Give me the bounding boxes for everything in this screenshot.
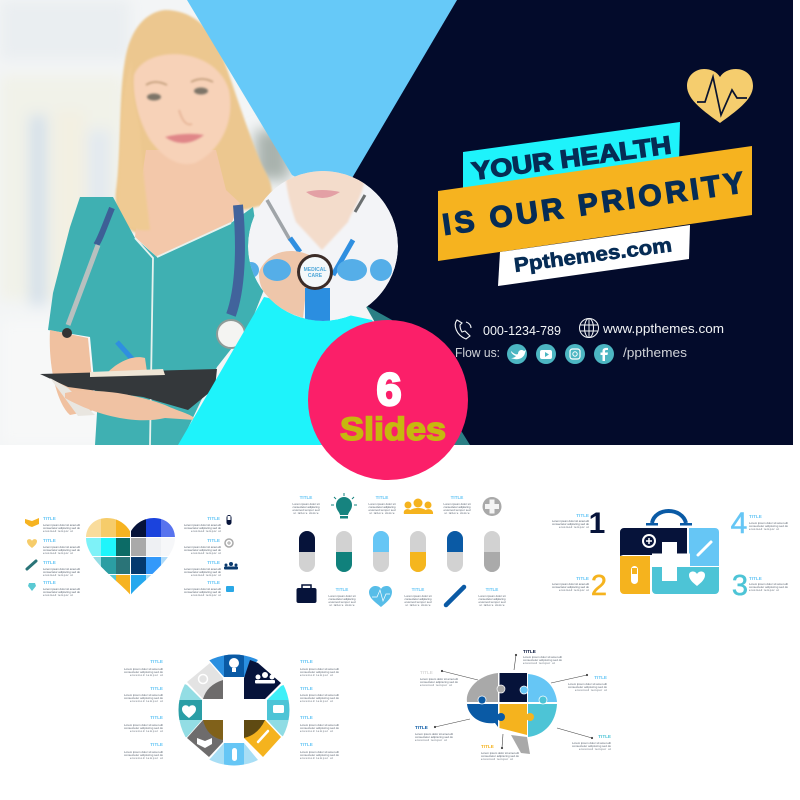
brain labels: Lorem ipsum dolor sit amet elit [523, 655, 562, 659]
wheel right labels: Lorem ipsum dolor sit amet elit [300, 750, 339, 754]
bottom text blocks: ut labore dolore [406, 603, 431, 607]
wheel segments [178, 654, 290, 766]
bottom text blocks: Lorem ipsum dolor sit [478, 594, 506, 598]
kit labels: Lorem ipsum dolor sit amet elit [749, 582, 788, 586]
hair front strand [118, 133, 150, 231]
number 3: 3 [732, 570, 748, 602]
kit labels: Lorem ipsum dolor sit amet elit [749, 521, 788, 525]
icon: plus circle [225, 539, 233, 547]
wheel right labels: eiusmod tempor ut [300, 729, 333, 733]
slide 5: puzzle brain [415, 649, 611, 761]
face [134, 54, 230, 164]
top text blocks: consectetur adipiscing [368, 505, 396, 509]
right labels: consectetur adipiscing sed do [184, 570, 221, 574]
kit dark panel [620, 528, 687, 556]
top text blocks: Lorem ipsum dolor sit [444, 502, 471, 506]
brain labels: consectetur adipiscing sed do [481, 754, 519, 758]
stethoscope head [297, 254, 333, 290]
icon: pill [226, 515, 232, 525]
icon: plus circle [482, 497, 502, 516]
right labels: eiusmod tempor ut [191, 573, 221, 577]
nurse illustration [40, 10, 272, 445]
slide 2: capsules [292, 493, 506, 607]
right labels: TITLE [207, 580, 220, 585]
wheel left labels: eiusmod tempor ut [130, 756, 163, 760]
bottom text blocks: consectetur adipiscing [404, 597, 432, 601]
headline band: website: Ppthemes.com [513, 234, 673, 277]
kit labels: consectetur adipiscing sed do [552, 522, 589, 526]
right labels: consectetur adipiscing sed do [184, 548, 221, 552]
kit yellow panel [620, 556, 650, 594]
wheel right labels: eiusmod tempor ut [300, 756, 333, 760]
bottom text blocks: Lorem ipsum dolor sit [404, 594, 432, 598]
left labels: TITLE [43, 538, 56, 543]
kit labels: eiusmod tempor ut [749, 527, 779, 531]
bottom text blocks: ut labore dolore [480, 603, 505, 607]
top text blocks: Lorem ipsum dolor sit [292, 502, 320, 506]
stethoscope tubing [267, 195, 365, 275]
top text blocks: eiusmod tempor sed [368, 508, 396, 512]
medical icon badges [243, 259, 392, 281]
left labels [43, 516, 80, 597]
bottom text blocks: eiusmod tempor sed [328, 600, 356, 604]
holding hand [65, 391, 195, 420]
brain labels: Lorem ipsum dolor sit amet elit [481, 751, 519, 755]
brain labels: eiusmod tempor ut [575, 688, 607, 692]
left labels: Lorem ipsum dolor sit amet elit [43, 545, 80, 549]
kit labels: consectetur adipiscing sed do [749, 524, 788, 528]
right labels: TITLE [207, 560, 220, 565]
wheel left labels: TITLE [150, 715, 163, 720]
number 4: 4 [731, 507, 747, 540]
headline band: your health [463, 122, 680, 194]
icon: bulb [331, 493, 357, 518]
icon: people [224, 562, 238, 570]
right labels: Lorem ipsum dolor sit amet elit [184, 587, 221, 591]
stethoscope tube [305, 288, 330, 321]
right labels: TITLE [207, 538, 220, 543]
brain labels: TITLE [481, 744, 494, 749]
wheel right labels: consectetur adipiscing sed do [300, 753, 339, 757]
right labels: Lorem ipsum dolor sit amet elit [184, 545, 221, 549]
kit blue panel [689, 528, 719, 566]
brain labels: Lorem ipsum dolor sit amet elit [568, 682, 607, 686]
brain puzzle [467, 673, 557, 754]
kit labels: Lorem ipsum dolor sit amet elit [552, 582, 589, 586]
hair back [116, 10, 272, 236]
brain labels: eiusmod tempor ut [579, 747, 611, 751]
arm [50, 330, 95, 415]
brain labels: TITLE [598, 734, 611, 739]
follow label: Flow us: [455, 346, 500, 360]
left labels: TITLE [43, 560, 56, 565]
circular doctor photo [243, 165, 398, 326]
wheel left labels [124, 659, 163, 760]
left labels: Lorem ipsum dolor sit amet elit [43, 523, 80, 527]
top text blocks: consectetur adipiscing [444, 505, 471, 509]
right labels: consectetur adipiscing sed do [184, 590, 221, 594]
top text blocks: TITLE [300, 495, 312, 500]
headline band: your health: YOUR HEALTH [470, 131, 673, 186]
left labels: Lorem ipsum dolor sit amet elit [43, 587, 80, 591]
brain labels: Lorem ipsum dolor sit amet elit [420, 677, 458, 681]
left labels: consectetur adipiscing sed do [43, 590, 80, 594]
brain labels: consectetur adipiscing sed do [420, 680, 458, 684]
wheel left labels: Lorem ipsum dolor sit amet elit [124, 667, 163, 671]
left labels: consectetur adipiscing sed do [43, 526, 80, 530]
bottom text blocks: Lorem ipsum dolor sit [328, 594, 356, 598]
brain labels [415, 649, 611, 761]
wheel left labels: Lorem ipsum dolor sit amet elit [124, 750, 163, 754]
bottom text blocks: TITLE [336, 587, 348, 592]
wheel left labels: Lorem ipsum dolor sit amet elit [124, 723, 163, 727]
pen [117, 342, 135, 362]
social icons [507, 344, 614, 364]
wheel right labels: Lorem ipsum dolor sit amet elit [300, 667, 339, 671]
wheel icons [182, 658, 284, 761]
heart pulse icon [687, 69, 753, 123]
wheel right labels: consectetur adipiscing sed do [300, 726, 339, 730]
kit labels: TITLE [576, 513, 589, 518]
bottom text blocks: TITLE [486, 587, 498, 592]
left labels: Lorem ipsum dolor sit amet elit [43, 567, 80, 571]
number 2: 2 [591, 570, 607, 602]
top text blocks: ut labore dolore [294, 511, 319, 515]
brain labels: consectetur adipiscing sed do [415, 735, 453, 739]
wheel left labels: TITLE [150, 686, 163, 691]
left labels: TITLE [43, 516, 56, 521]
kit labels: TITLE [749, 514, 762, 519]
top text blocks: eiusmod tempor sed [444, 508, 471, 512]
brain labels: consectetur adipiscing sed do [568, 685, 607, 689]
wheel right labels: TITLE [300, 686, 313, 691]
right labels: consectetur adipiscing sed do [184, 526, 221, 530]
bottom text blocks: consectetur adipiscing [478, 597, 506, 601]
kit labels: TITLE [576, 576, 589, 581]
right labels: Lorem ipsum dolor sit amet elit [184, 523, 221, 527]
headline band: website [498, 225, 690, 286]
thermometer [698, 542, 711, 555]
wheel right labels: Lorem ipsum dolor sit amet elit [300, 693, 339, 697]
slide 4: cross wheel [124, 650, 339, 770]
wheel right labels [300, 659, 339, 760]
right labels: Lorem ipsum dolor sit amet elit [184, 567, 221, 571]
leader lines [434, 654, 593, 749]
wheel right labels: eiusmod tempor ut [300, 673, 333, 677]
brain labels: TITLE [594, 675, 607, 680]
hand [259, 251, 310, 318]
right labels: eiusmod tempor ut [191, 593, 221, 597]
kit labels: TITLE [749, 576, 762, 581]
brain labels: consectetur adipiscing sed do [572, 744, 611, 748]
eyes and mouth [146, 79, 213, 143]
wheel right labels: TITLE [300, 742, 313, 747]
icon: briefcase [296, 585, 316, 603]
wheel right labels: TITLE [300, 715, 313, 720]
kit teal panel [652, 567, 719, 594]
wheel right labels: eiusmod tempor ut [300, 699, 333, 703]
headline band: is our priority: IS OUR PRIORITY [440, 166, 746, 242]
bottom text blocks [328, 587, 506, 607]
right labels: eiusmod tempor ut [191, 551, 221, 555]
bottom text blocks: ut labore dolore [330, 603, 355, 607]
right labels: eiusmod tempor ut [191, 529, 221, 533]
top text blocks: TITLE [376, 495, 388, 500]
slide 1: heart grid [25, 515, 238, 597]
icon: globe [580, 318, 598, 338]
kit labels: eiusmod tempor ut [559, 525, 589, 529]
wheel left labels: consectetur adipiscing sed do [124, 696, 163, 700]
wheel right labels: consectetur adipiscing sed do [300, 670, 339, 674]
scrub collar and placket [135, 223, 231, 445]
icon: small heart [27, 539, 37, 548]
contact row [455, 318, 724, 364]
wheel left labels: eiusmod tempor ut [130, 673, 163, 677]
brain labels: eiusmod tempor ut [415, 738, 447, 742]
icon: bulb [28, 583, 36, 591]
icon: thermometer [27, 561, 36, 569]
left labels: eiusmod tempor ut [43, 573, 73, 577]
icon: heart pulse [369, 586, 392, 607]
left labels: eiusmod tempor ut [43, 593, 73, 597]
capsule row [299, 531, 500, 572]
brain labels: consectetur adipiscing sed do [523, 658, 562, 662]
icon: handshake [25, 518, 39, 527]
wheel right labels: TITLE [300, 659, 313, 664]
white cross [652, 542, 690, 581]
kit labels: eiusmod tempor ut [749, 588, 779, 592]
slide count badge: Slides [340, 411, 446, 447]
bottom text blocks: consectetur adipiscing [328, 597, 356, 601]
website: www.ppthemes.com [602, 322, 724, 336]
top text blocks: Lorem ipsum dolor sit [368, 502, 396, 506]
brain labels: eiusmod tempor ut [523, 661, 555, 665]
neck and chest [135, 150, 240, 257]
left labels: consectetur adipiscing sed do [43, 570, 80, 574]
kit labels: eiusmod tempor ut [559, 588, 589, 592]
kit labels [552, 513, 788, 592]
icon: case [226, 586, 234, 592]
icon: phone [455, 320, 471, 339]
writing hand [108, 357, 147, 372]
top text blocks: ut labore dolore [370, 511, 395, 515]
wheel left labels: consectetur adipiscing sed do [124, 753, 163, 757]
heart chart [86, 518, 175, 595]
bottom text blocks: eiusmod tempor sed [404, 600, 432, 604]
top text blocks: ut labore dolore [444, 511, 470, 515]
navy panel [345, 0, 793, 445]
brain labels: eiusmod tempor ut [481, 757, 513, 761]
wheel left labels: consectetur adipiscing sed do [124, 670, 163, 674]
kit labels: Lorem ipsum dolor sit amet elit [552, 519, 589, 523]
right labels [184, 516, 221, 597]
slide count badge [308, 320, 468, 480]
wheel right labels: Lorem ipsum dolor sit amet elit [300, 723, 339, 727]
top text blocks: TITLE [451, 495, 463, 500]
brain labels: TITLE [523, 649, 536, 654]
wheel right labels: consectetur adipiscing sed do [300, 696, 339, 700]
doctor skin and lips [285, 165, 365, 250]
stethoscope [62, 205, 245, 348]
brain labels: Lorem ipsum dolor sit amet elit [415, 732, 453, 736]
sky blue triangle [187, 0, 457, 177]
left labels: consectetur adipiscing sed do [43, 548, 80, 552]
left labels: eiusmod tempor ut [43, 529, 73, 533]
social handle: /ppthemes [623, 346, 687, 360]
heart icon [689, 571, 705, 586]
top text blocks: eiusmod tempor sed [292, 508, 320, 512]
right labels: TITLE [207, 516, 220, 521]
bottom text blocks: TITLE [412, 587, 424, 592]
bottom text blocks: eiusmod tempor sed [478, 600, 506, 604]
wheel left labels: eiusmod tempor ut [130, 699, 163, 703]
icon: thermometer [446, 587, 464, 605]
wheel left labels: Lorem ipsum dolor sit amet elit [124, 693, 163, 697]
scrubs [48, 197, 265, 445]
brain labels: Lorem ipsum dolor sit amet elit [572, 741, 611, 745]
number 1: 1 [589, 507, 605, 540]
top text blocks [292, 495, 471, 515]
headline band: is our priority [438, 146, 752, 261]
brain labels: TITLE [415, 725, 428, 730]
blurred hospital background [0, 0, 374, 445]
kit labels: consectetur adipiscing sed do [552, 585, 589, 589]
brain labels: TITLE [420, 670, 433, 675]
pill [631, 566, 638, 584]
slide count badge: 6 [376, 364, 402, 415]
teal strip [365, 305, 470, 445]
kit handle [646, 511, 692, 526]
top text blocks: consectetur adipiscing [292, 505, 320, 509]
wheel left labels: TITLE [150, 742, 163, 747]
stethoscope head: MEDICAL [304, 267, 326, 273]
icon: people [404, 498, 433, 514]
wheel left labels: eiusmod tempor ut [130, 729, 163, 733]
left labels: TITLE [43, 580, 56, 585]
stethoscope head: CARE [308, 273, 323, 279]
slide 3: medical kit [552, 507, 788, 602]
kit labels: consectetur adipiscing sed do [749, 585, 788, 589]
wheel left labels: TITLE [150, 659, 163, 664]
cyan triangle [178, 297, 373, 445]
brain labels: eiusmod tempor ut [420, 683, 452, 687]
left labels: eiusmod tempor ut [43, 551, 73, 555]
plus badge [642, 534, 656, 548]
hero banner [0, 0, 793, 445]
phone number: 000-1234-789 [483, 324, 561, 338]
clipboard [40, 369, 217, 416]
wheel left labels: consectetur adipiscing sed do [124, 726, 163, 730]
